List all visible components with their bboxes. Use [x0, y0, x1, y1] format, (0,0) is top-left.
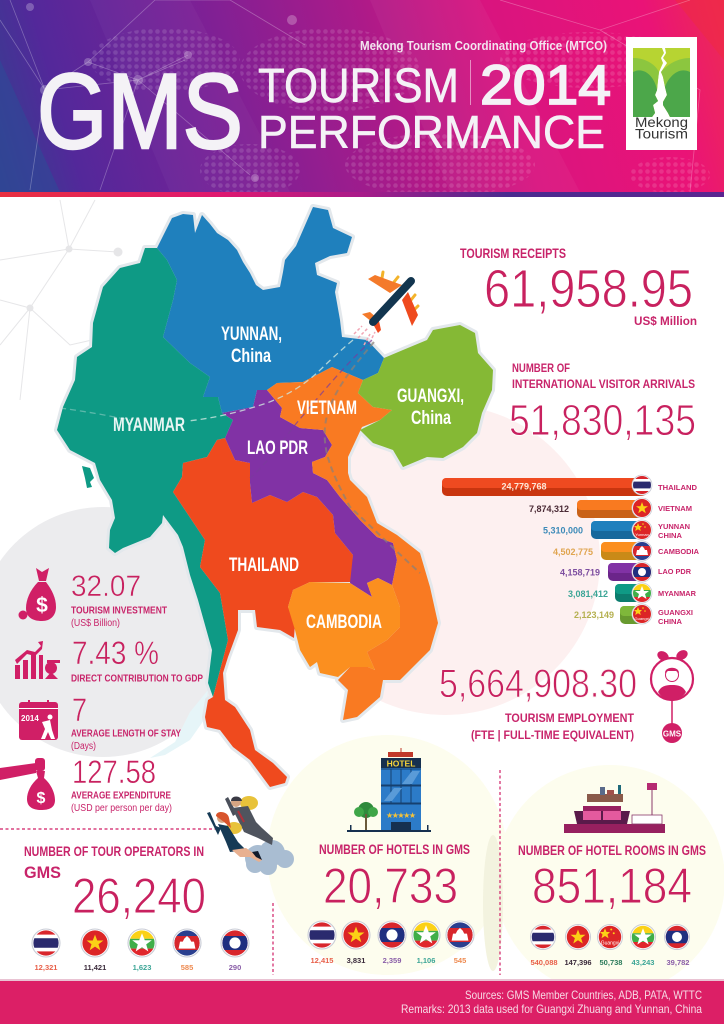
background circles	[0, 405, 724, 995]
stat: tourism employment	[439, 662, 637, 742]
stat: tourism receipts: 61,958.95	[484, 259, 693, 319]
flags: hotels: 545	[454, 956, 466, 965]
stat: average length of stay	[19, 692, 181, 752]
title: 2014	[480, 53, 611, 116]
flags: hotels	[308, 921, 474, 965]
stat: tour operators: GMS	[24, 864, 61, 882]
map region: Lao PDR	[222, 390, 397, 597]
stat: average length of stay: AVERAGE LENGTH OF STAY	[71, 728, 181, 740]
map of GMS	[57, 207, 493, 787]
bar: Myanmar	[568, 583, 697, 603]
stat: tourism investment: TOURISM INVESTMENT	[71, 606, 167, 616]
bar: Guangxi: GUANGXI	[658, 608, 693, 617]
icon: money bag: $	[36, 594, 48, 617]
flags: hotel rooms: 147,396	[564, 958, 592, 967]
bar: Vietnam	[529, 498, 692, 518]
header bottom stripe	[0, 192, 724, 197]
map region: Yunnan	[157, 207, 384, 413]
flags: hotel rooms	[530, 924, 690, 967]
map labels: THAILAND	[229, 555, 299, 576]
icon: hotel room furniture	[564, 783, 665, 833]
bar: Yunnan: CHINA	[658, 531, 683, 540]
map labels: China	[231, 346, 271, 367]
stat: international visitor arrivals	[509, 361, 696, 445]
man in suit	[225, 796, 273, 845]
map region: Myanmar	[57, 248, 233, 697]
stat: hotels: NUMBER OF HOTELS IN GMS	[319, 842, 470, 857]
icon: growth chart	[15, 641, 60, 679]
icon: employment person with GMS pin	[651, 648, 693, 743]
icon: employment person with GMS pin: GMS	[663, 730, 682, 738]
icon: calendar with hiker: 2014	[21, 714, 39, 723]
bar: Thailand: THAILAND	[658, 483, 698, 492]
flags: hotel rooms: 39,782	[667, 958, 689, 967]
flags: hotel rooms: 43,243	[632, 958, 654, 967]
flags: tour operators: 585	[181, 963, 193, 972]
bar: Thailand: 24,779,768	[501, 482, 547, 492]
flags: hotels: 1,106	[417, 956, 435, 965]
stat: direct contribution to GDP: DIRECT CONTRIBUTION TO GDP	[71, 674, 203, 684]
network decoration	[0, 200, 122, 400]
stat: average expenditure: AVERAGE EXPENDITURE	[71, 790, 171, 802]
bar: Cambodia: 4,502,775	[553, 547, 593, 557]
stat: tour operators: 26,240	[72, 868, 206, 924]
stat: tourism investment: 32.07	[71, 570, 141, 603]
flags: hotels: 2,359	[383, 956, 401, 965]
bar: Guangxi: CHINA	[658, 617, 683, 626]
bar: Yunnan	[543, 520, 690, 540]
flags: tour operators	[32, 929, 249, 972]
map islands: Myanmar coast	[82, 466, 94, 488]
stat: direct contribution to GDP: 7.43 %	[72, 635, 159, 671]
map labels: LAO PDR	[247, 438, 308, 459]
map region: Cambodia	[288, 578, 400, 677]
icon: hand holding money bag	[0, 758, 55, 810]
map region: Guangxi	[358, 325, 493, 467]
bar: Guangxi: 2,123,149	[574, 610, 614, 620]
stat: average expenditure: 127.58	[72, 754, 156, 790]
stat: tour operators: NUMBER OF TOUR OPERATORS IN	[24, 843, 204, 859]
bar: Yunnan: 5,310,000	[543, 526, 583, 536]
dashed separators	[0, 770, 500, 975]
woman in navy	[207, 812, 262, 862]
stat: tourism employment: (FTE | FULL-TIME EQUIVALENT)	[471, 728, 634, 742]
stat: average expenditure	[0, 754, 172, 814]
flags: hotel rooms: 50,738	[600, 958, 622, 967]
stat: tourism employment: TOURISM EMPLOYMENT	[505, 711, 635, 725]
icon: hotel building	[347, 748, 431, 832]
header banner	[0, 0, 724, 197]
map labels: YUNNAN,	[221, 324, 282, 345]
stat: international visitor arrivals: 51,830,135	[509, 396, 696, 445]
cloud	[245, 840, 294, 875]
stat: hotel rooms	[518, 843, 706, 967]
icon: hotel building: ★★★★★	[386, 811, 416, 820]
map labels: MYANMAR	[113, 415, 185, 436]
flags: hotels: 3,831	[347, 956, 365, 965]
stat: tour operators	[24, 843, 249, 972]
flags: hotel rooms: 540,088	[530, 958, 558, 967]
bar: Vietnam: VIETNAM	[658, 504, 692, 513]
logo: Mekong Tourism: Mekong	[635, 115, 688, 130]
stat: tourism receipts: US$ Million	[634, 314, 697, 328]
map labels: CAMBODIA	[306, 612, 382, 633]
stat: tourism receipts: TOURISM RECEIPTS	[460, 245, 566, 261]
map labels: VIETNAM	[297, 398, 357, 419]
logo: Mekong Tourism	[626, 37, 697, 150]
stat: hotels	[308, 842, 474, 965]
title: GMS	[37, 51, 243, 171]
flags: tour operators: 290	[229, 963, 241, 972]
icon: airplane	[354, 272, 418, 345]
bar: Thailand	[442, 475, 698, 496]
title: TOURISM	[258, 60, 459, 113]
flags: tour operators: 11,421	[84, 963, 106, 972]
flags: tour operators: 12,321	[35, 963, 57, 972]
bar: Yunnan: YUNNAN	[658, 522, 690, 531]
stat: international visitor arrivals: NUMBER OF	[512, 361, 570, 375]
bar: Vietnam: 7,874,312	[529, 504, 569, 514]
stat: tourism investment: (US$ Billion)	[71, 618, 120, 629]
flags: hotels: 12,415	[311, 956, 333, 965]
map region: Thailand	[173, 438, 353, 787]
stat: international visitor arrivals: INTERNATIONAL VISITOR ARRIVALS	[512, 377, 695, 391]
bar: Lao PDR: 4,158,719	[560, 568, 600, 578]
title	[37, 51, 611, 171]
bar: Cambodia	[553, 541, 700, 561]
icon: calendar with hiker	[19, 700, 58, 740]
bar: Cambodia: CAMBODIA	[658, 547, 700, 556]
stat: average expenditure: (USD per person per day)	[71, 803, 172, 814]
icon: flying travellers on cloud	[207, 796, 294, 875]
stat: average length of stay: 7	[72, 692, 87, 728]
map labels: China	[411, 408, 451, 429]
stat: hotel rooms: 851,184	[532, 858, 692, 914]
icon: hand holding money bag: $	[37, 790, 46, 807]
map region: Vietnam	[267, 367, 438, 720]
bar chart: arrivals by country	[442, 475, 700, 626]
stat: tourism receipts	[460, 245, 697, 328]
title: PERFORMANCE	[258, 106, 605, 158]
bar: Myanmar: MYANMAR	[658, 589, 697, 598]
footer	[0, 979, 724, 1024]
bar: Myanmar: 3,081,412	[568, 589, 608, 599]
stat: average length of stay: (Days)	[71, 741, 96, 752]
office name: Mekong Tourism Coordinating Office (MTCO)	[360, 38, 607, 53]
map labels: GUANGXI,	[397, 386, 464, 407]
bar: Guangxi	[574, 604, 693, 626]
bar: Lao PDR	[560, 562, 692, 582]
bar: Lao PDR: LAO PDR	[658, 567, 692, 576]
stat: tourism employment: 5,664,908.30	[439, 662, 637, 706]
stat: direct contribution to GDP	[15, 635, 203, 684]
icon: hotel building: HOTEL	[387, 758, 415, 768]
flags: tour operators: 1,623	[133, 963, 151, 972]
flight paths	[60, 340, 420, 573]
stat: hotels: 20,733	[323, 858, 458, 914]
stat: tourism investment	[18, 568, 167, 629]
logo: Mekong Tourism: Tourism	[635, 126, 688, 142]
icon: money bag	[18, 568, 56, 621]
map labels	[113, 324, 464, 633]
